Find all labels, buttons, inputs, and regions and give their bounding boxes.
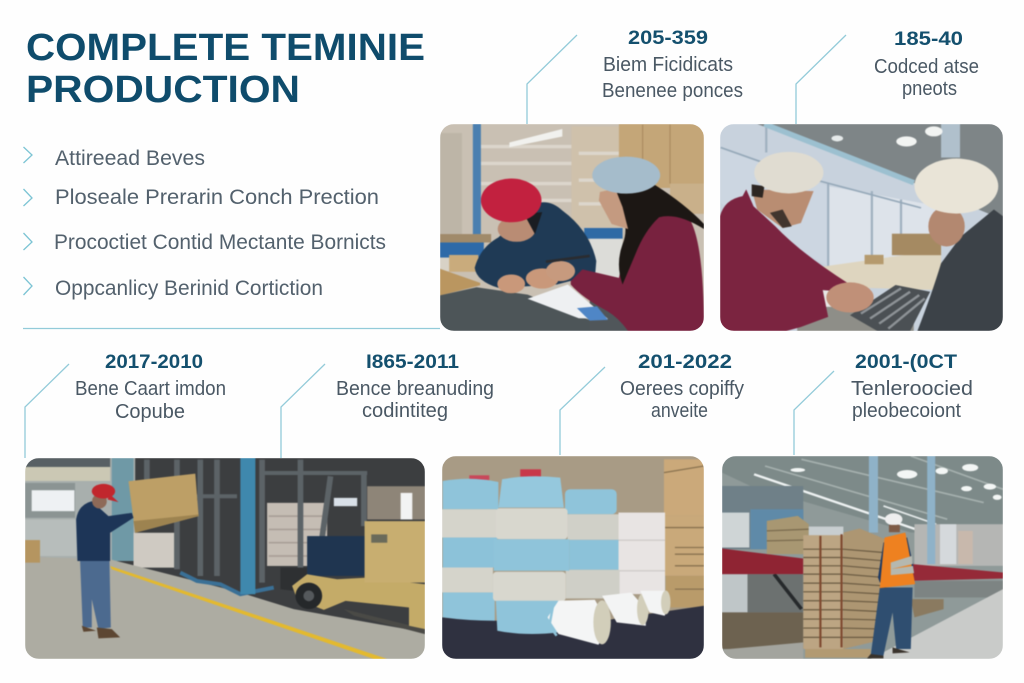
stat: bottom 3: Oerees copiffy (620, 378, 744, 400)
stat: bottom 4: 2001-(0CT (855, 351, 957, 373)
stat: bottom 1: 2017-2010 (105, 351, 203, 373)
stat: bottom 2 (336, 351, 494, 422)
photo: man at keyboard (720, 124, 1003, 331)
stat: bottom 3: anveite (651, 400, 708, 422)
stat: top 2: 185-40 (894, 28, 963, 50)
stat: bottom 2: codintiteg (362, 400, 448, 422)
stat: bottom 1 (75, 351, 226, 423)
stat: top 1: Biem Ficidicats (603, 54, 733, 76)
stat: bottom 1: Copube (115, 401, 185, 423)
photo: warehouse pallets and worker (722, 456, 1003, 659)
stat: bottom 2: I865-2011 (366, 351, 459, 373)
stat: top 1: Benenee ponces (602, 80, 743, 102)
stat: top 2: Codced atse (874, 56, 979, 78)
stat: bottom 4 (851, 351, 973, 422)
bullet list (24, 147, 386, 300)
bullet 4: Oppcanlicy Berinid Cortiction (55, 277, 323, 300)
bullet 3: Prococtiet Contid Mectante Bornicts (54, 231, 386, 254)
stat: bottom 1: Bene Caart imdon (75, 378, 226, 400)
title: PRODUCTION (26, 69, 300, 111)
stat: top 1: 205-359 (628, 27, 708, 49)
title (26, 27, 425, 111)
photo: warehouse worker with box (25, 458, 425, 659)
title: COMPLETE TEMINIE (26, 27, 425, 69)
stat: bottom 2: Bence breanuding (336, 378, 494, 400)
stat: top 1 (602, 27, 743, 102)
photo: two workers at table (440, 124, 704, 331)
stat: top 2: pneots (902, 78, 957, 100)
stat: bottom 4: Tenleroocied (851, 378, 973, 400)
stat: bottom 3 (620, 351, 744, 422)
photo: textile rolls (442, 456, 704, 659)
stat: bottom 4: pleobecoiont (852, 400, 961, 422)
connector lines (23, 35, 846, 458)
bullet 1: Attireead Beves (55, 147, 205, 170)
stat: top 2 (874, 28, 979, 100)
bullet 2: Ploseale Prerarin Conch Prection (55, 186, 379, 209)
stat: bottom 3: 201-2022 (638, 351, 732, 373)
